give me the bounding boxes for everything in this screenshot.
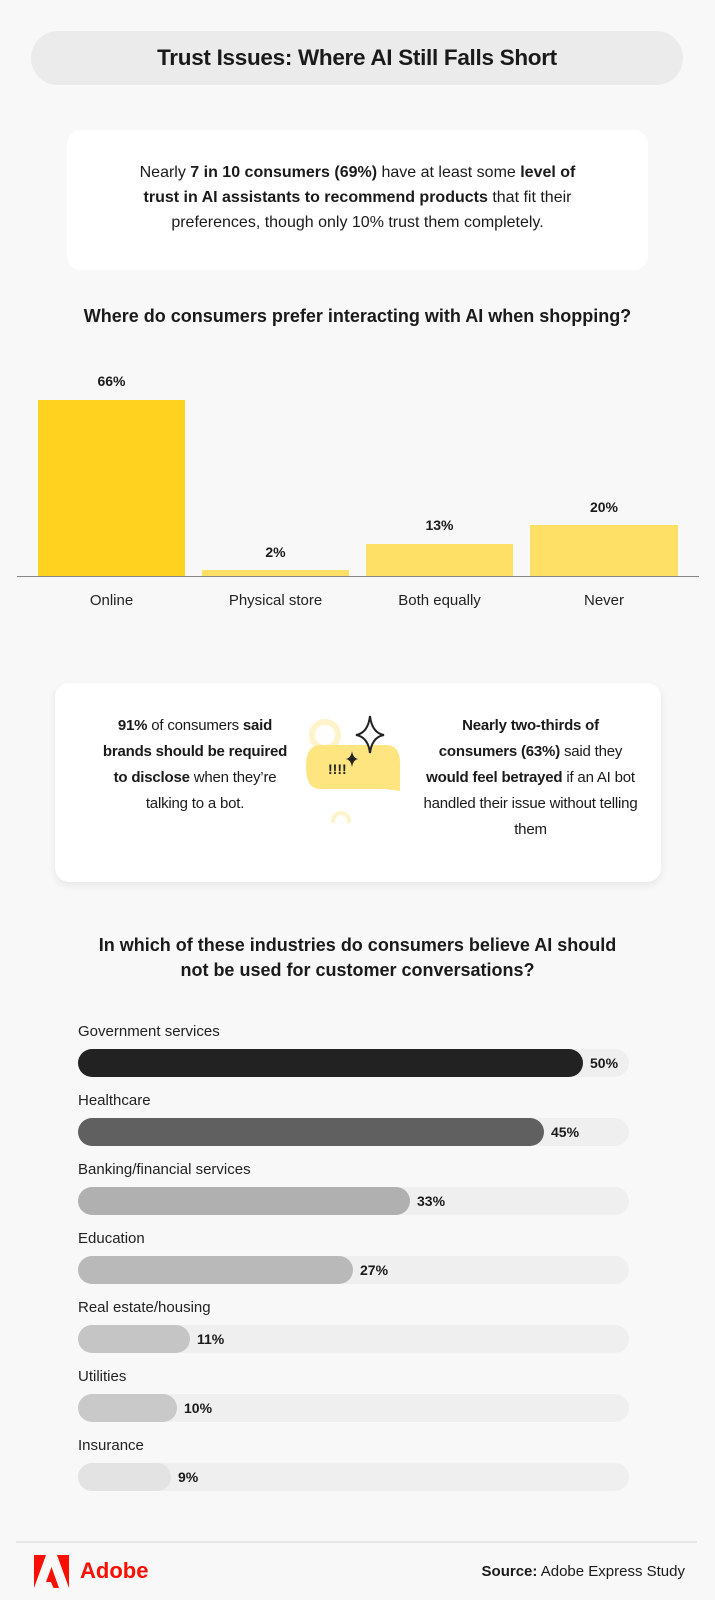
row: utilities: Utilities: [78, 1368, 126, 1385]
bar chart: channels: Never: [584, 592, 624, 609]
text: 91% disclose: 91% of consumers said brands should be required to disclose when they’re talking to a bot.: [103, 717, 287, 812]
bar chart: channels: Physical store: [229, 592, 322, 609]
title: Trust Issues: Where AI Still Falls Short: [157, 45, 557, 70]
bar chart: industries: 50%: [590, 1055, 618, 1071]
bar chart: channels: Online: [90, 592, 133, 609]
bar chart: industries: 9%: [178, 1469, 198, 1485]
bar: online: [38, 373, 185, 609]
callout: trust quote: Nearly 7 in 10 consumers (69%) have at least some level of trust in AI assistants to recommend products that fit their preferences, though only 10% trust them completely.: [140, 164, 575, 231]
heading: industries chart: [99, 935, 616, 980]
bar: physical store: 2%: [265, 544, 286, 560]
bar chart: industries: [78, 1023, 629, 1491]
heading: industries chart: not be used for customer conversations?: [180, 960, 535, 980]
row: insurance: Insurance: [78, 1437, 144, 1454]
bar: online: 66%: [97, 373, 126, 389]
row: healthcare: Healthcare: [78, 1092, 151, 1109]
text: 63% betrayed: Nearly two-thirds of consumers (63%) said they would feel betrayed if an AI bot handled their issue without telling them: [424, 717, 637, 838]
title: [31, 31, 683, 85]
row: education: Education: [78, 1230, 145, 1247]
source: Source: Adobe Express Study: [482, 1563, 685, 1580]
bar chart: industries: 27%: [360, 1262, 388, 1278]
heading: industries chart: In which of these industries do consumers believe AI should: [99, 935, 616, 955]
bar chart: channels: Both equally: [398, 592, 481, 609]
bar chart: industries: 10%: [184, 1400, 212, 1416]
logo: Adobe: [34, 1555, 148, 1588]
bar chart: industries: 45%: [551, 1124, 579, 1140]
callout: trust quote: [67, 130, 648, 270]
bar: never: 20%: [590, 499, 618, 515]
bar: physical store: [202, 544, 349, 609]
bar: both equally: 13%: [425, 517, 454, 533]
logo: Adobe: Adobe: [80, 1558, 148, 1583]
bar chart: channels: [17, 373, 699, 609]
icon: speech bubble with sparkles: !!!!: [328, 761, 347, 777]
row: real estate: Real estate/housing: [78, 1299, 211, 1316]
bar chart: industries: 33%: [417, 1193, 445, 1209]
bar chart: industries: 11%: [197, 1331, 224, 1347]
bar: both equally: [366, 517, 513, 609]
row: government: Government services: [78, 1023, 220, 1040]
heading: channel chart: Where do consumers prefer interacting with AI when shopping?: [84, 306, 631, 326]
icon: speech bubble with sparkles: [306, 716, 400, 823]
bar: never: [530, 499, 678, 609]
panel: disclosure stats: [55, 683, 661, 882]
row: banking: Banking/financial services: [78, 1161, 251, 1178]
